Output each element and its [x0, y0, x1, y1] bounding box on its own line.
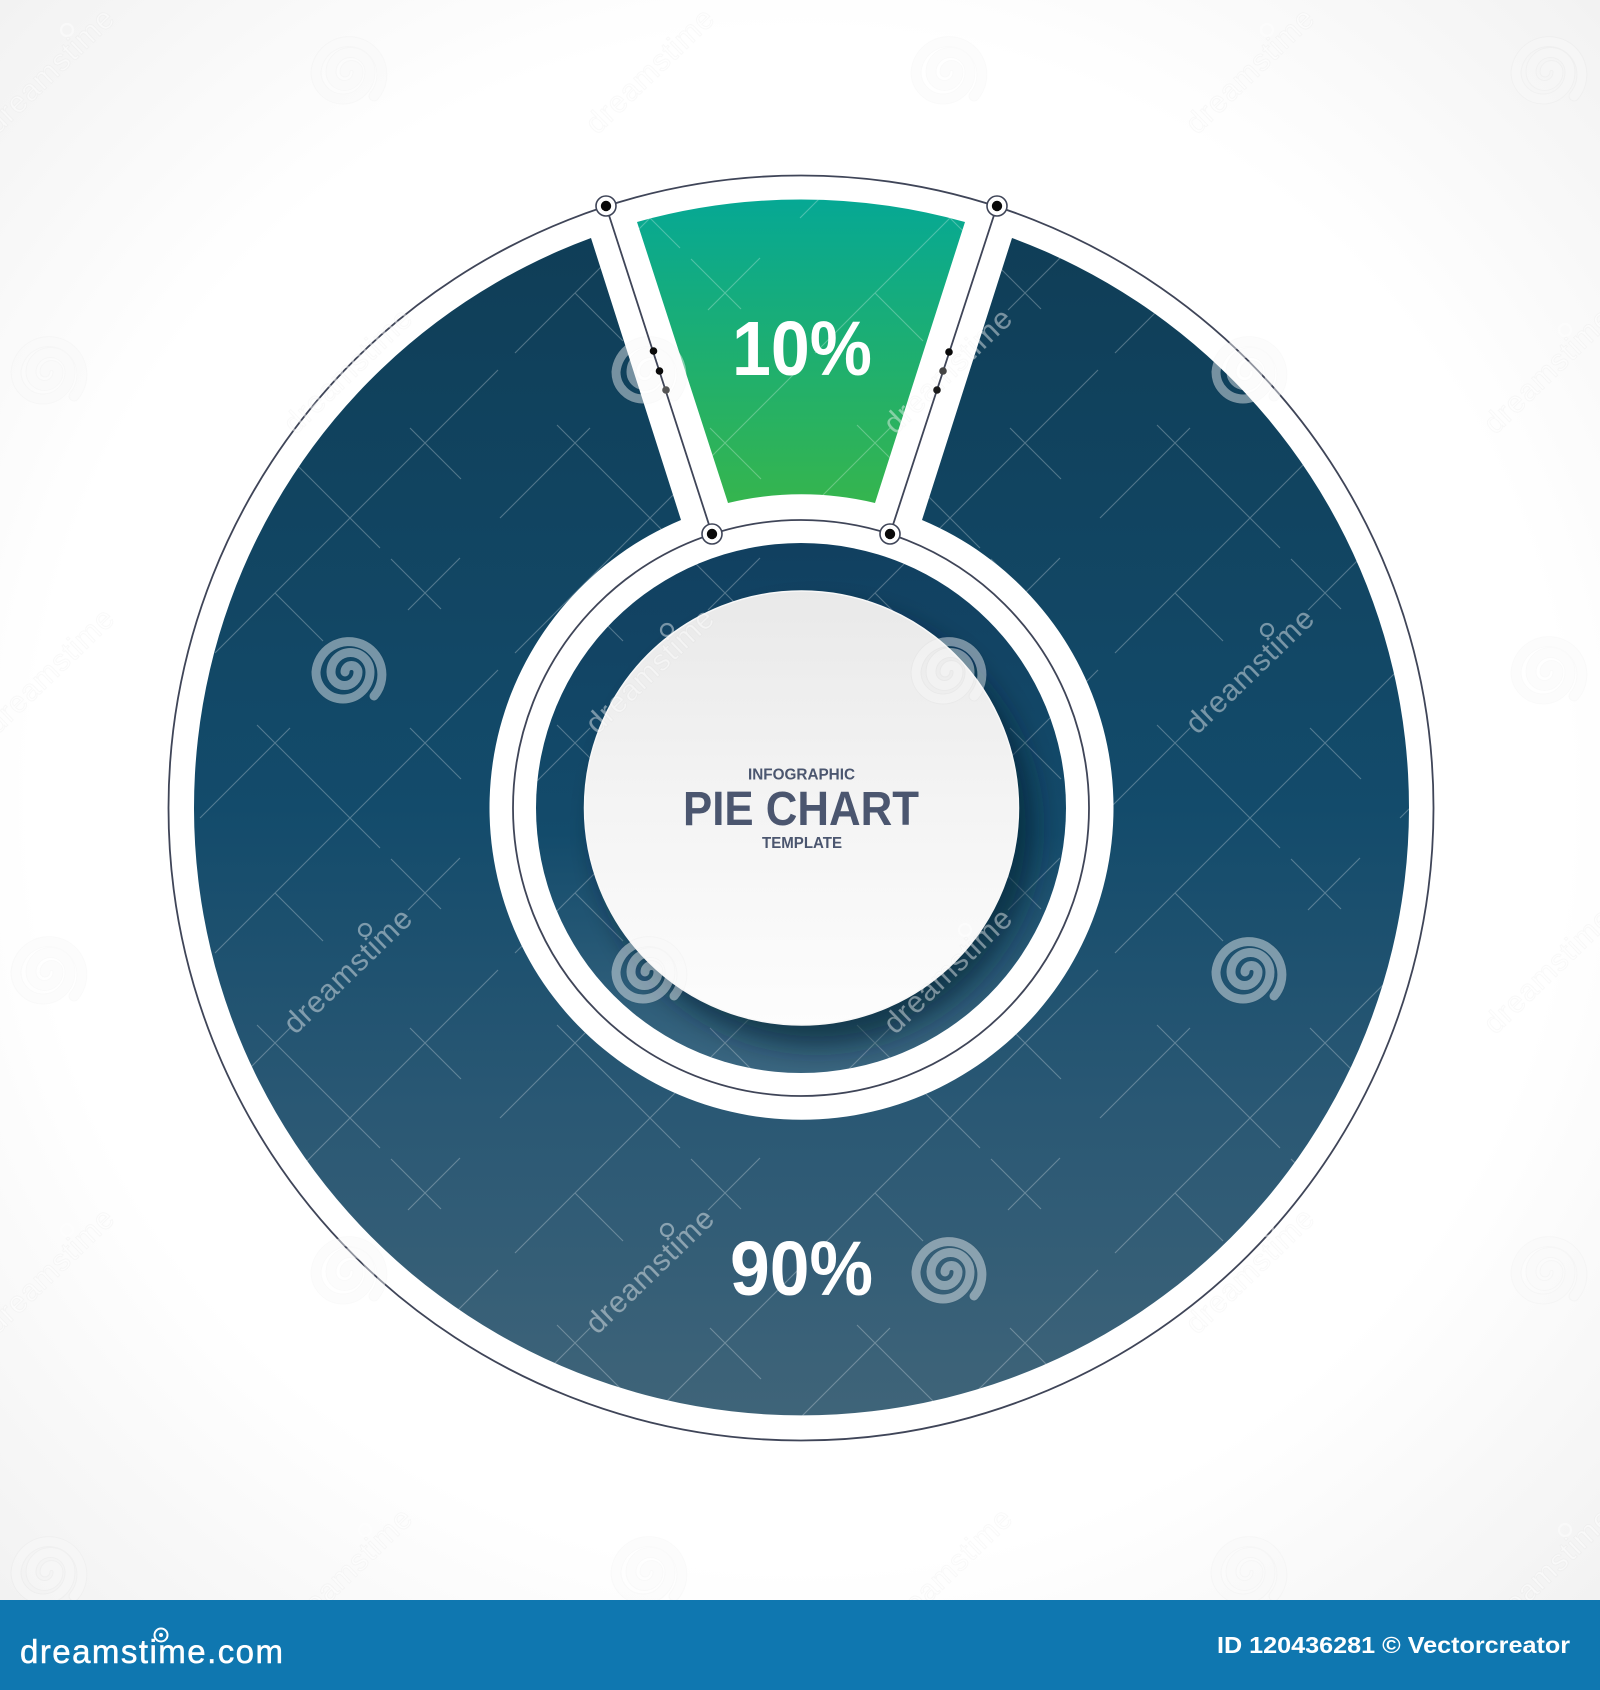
inner thin ring: [513, 520, 1089, 1096]
node: bottom left: [702, 524, 722, 544]
pie chart: [168, 176, 1434, 1440]
segment: 90% dark: [194, 238, 1409, 1415]
title line: TEMPLATE: TEMPLATE: [762, 835, 842, 852]
watermark layer: dreamstime: [579, 2, 721, 140]
node: top right: [987, 196, 1007, 216]
watermark layer: dreamstime: [1179, 1202, 1321, 1340]
left connector line: [606, 206, 712, 534]
label: 10%: 10%: [732, 306, 872, 392]
watermark layer: dreamstime: [277, 302, 419, 440]
center title: [683, 766, 919, 852]
node: bottom right: [880, 524, 900, 544]
watermark layer: dreamstime: [877, 1502, 1019, 1640]
footer credit: ID 120436281 © Vectorcreator: [1217, 1632, 1570, 1658]
watermark layer: dreamstime: [579, 602, 721, 740]
node: top left: [596, 196, 616, 216]
center disc shadow: [599, 610, 1035, 1046]
segment: 10% green: [637, 199, 965, 503]
right connector line: [890, 206, 997, 534]
outer thin ring: [168, 176, 1434, 1440]
label: 90%: 90%: [730, 1226, 873, 1312]
title line: INFOGRAPHIC: INFOGRAPHIC: [748, 766, 855, 784]
watermark layer: dreamstime: [877, 302, 1019, 440]
watermark layer: dreamstime: [579, 1202, 721, 1340]
watermark layer: dreamstime: [1179, 602, 1321, 740]
footer logo: dreamstime.com: [20, 1633, 283, 1670]
watermark layer: dreamstime: [277, 1502, 419, 1640]
footer bar: [0, 1600, 1600, 1690]
thin diagonal lines overlay: [194, 199, 1409, 1415]
watermark layer: dreamstime: [277, 902, 419, 1040]
center disc: [584, 591, 1018, 1025]
watermark layer: dreamstime: [877, 902, 1019, 1040]
title line: PIE CHART: PIE CHART: [683, 783, 919, 836]
watermark layer: dreamstime: [1179, 2, 1321, 140]
inner dark circle: [536, 543, 1066, 1073]
